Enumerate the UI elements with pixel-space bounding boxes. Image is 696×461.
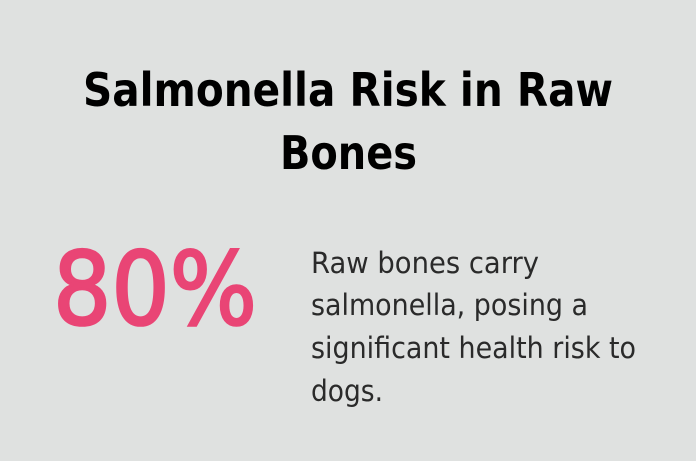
- description text: significant health risk to: [311, 331, 636, 365]
- description text: salmonella, posing a: [311, 288, 588, 322]
- title: Salmonella Risk in Raw: [83, 63, 613, 117]
- description text: dogs.: [311, 374, 383, 408]
- title: Bones: [280, 126, 417, 180]
- description text: Raw bones carry: [311, 246, 539, 280]
- statistic: 80%: 80%: [53, 230, 257, 348]
- title: [83, 63, 613, 180]
- description text: [311, 246, 636, 408]
